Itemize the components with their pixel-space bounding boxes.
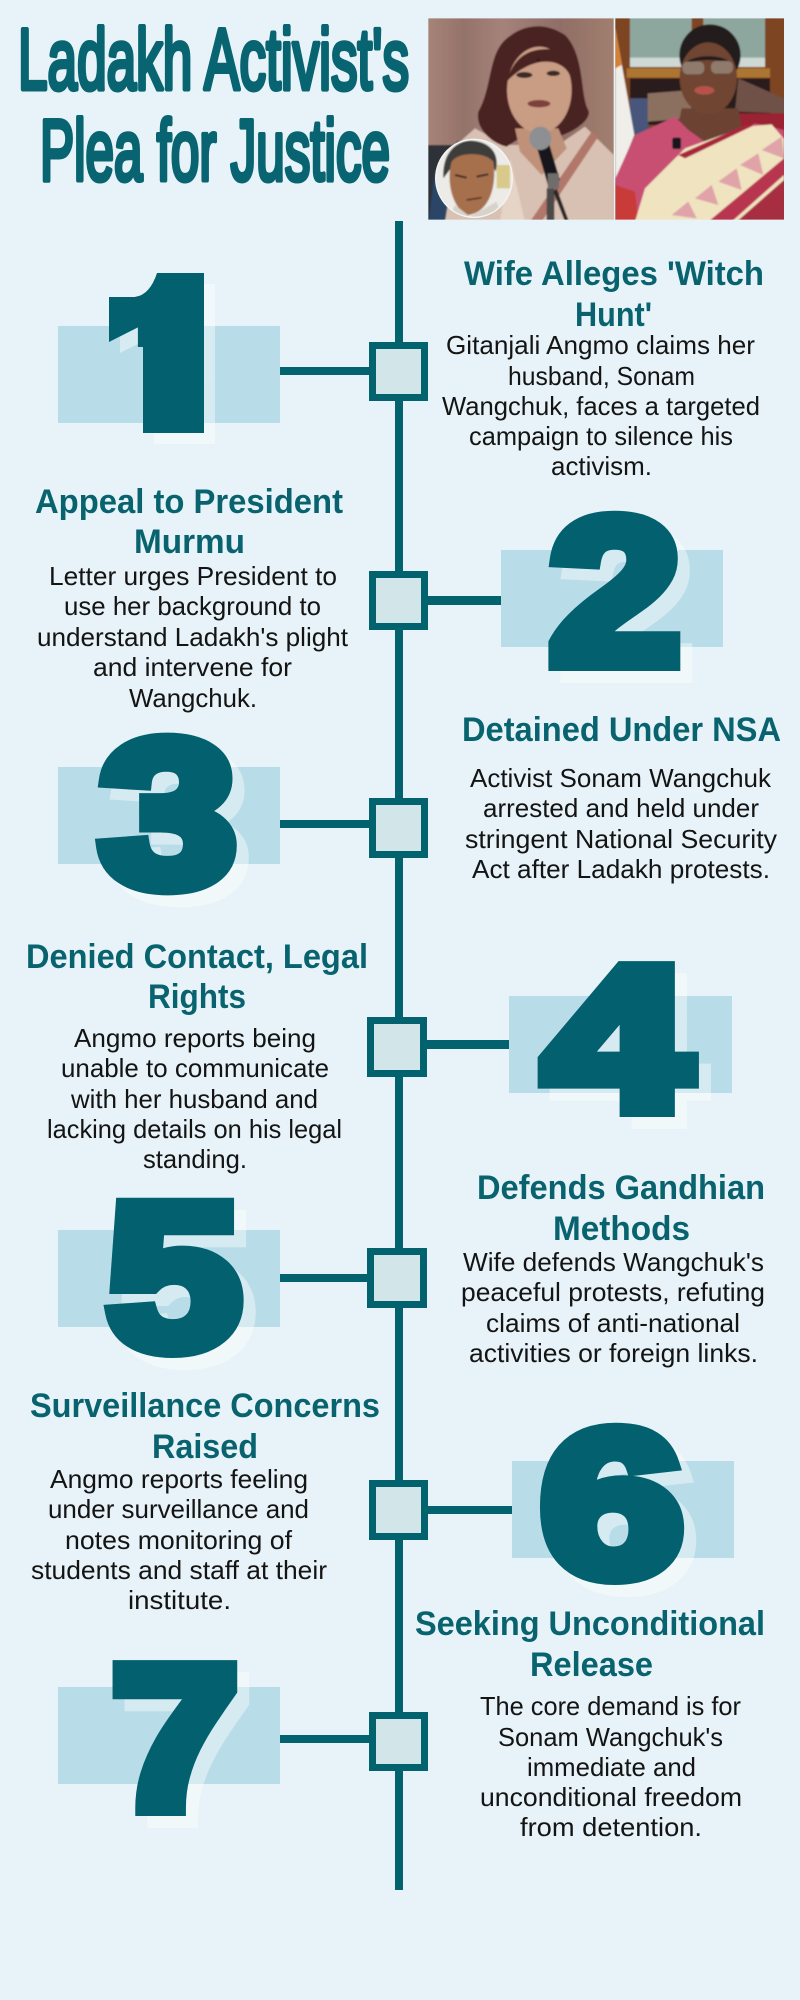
description: claims of anti-national bbox=[486, 1308, 740, 1338]
description: activism. bbox=[551, 451, 652, 481]
description: Sonam Wangchuk's bbox=[498, 1722, 723, 1752]
description bbox=[37, 561, 349, 713]
description: lacking details on his legal bbox=[47, 1114, 342, 1144]
number 6 block: 6 bbox=[553, 1401, 695, 1631]
step 3 bbox=[58, 699, 781, 941]
connector bbox=[280, 820, 370, 828]
node bbox=[370, 1020, 424, 1074]
description: The core demand is for bbox=[480, 1691, 741, 1721]
heading: Murmu bbox=[134, 523, 245, 561]
description: Wangchuk. bbox=[129, 683, 257, 713]
step 2 bbox=[35, 476, 723, 719]
title: Ladakh Activist's bbox=[18, 12, 409, 108]
description: unconditional freedom bbox=[480, 1782, 742, 1812]
number 1 block bbox=[58, 273, 280, 444]
heading: Release bbox=[530, 1646, 653, 1684]
connector bbox=[427, 1040, 509, 1049]
description: Wangchuk, faces a targeted bbox=[442, 391, 760, 421]
description: under surveillance and bbox=[48, 1494, 309, 1524]
number 4 block bbox=[509, 925, 732, 1164]
connector bbox=[280, 1735, 370, 1743]
connector bbox=[280, 1274, 368, 1282]
photo: President Droupadi Murmu bbox=[612, 15, 788, 225]
node bbox=[372, 574, 424, 626]
description: Wife defends Wangchuk's bbox=[463, 1247, 764, 1277]
description: Gitanjali Angmo claims her bbox=[446, 330, 755, 360]
number 3 block: 3 bbox=[112, 711, 248, 941]
description bbox=[465, 763, 777, 884]
number 2 block bbox=[501, 476, 723, 719]
description: and intervene for bbox=[93, 652, 292, 682]
number 2 block: 2 bbox=[562, 488, 692, 719]
description bbox=[47, 1023, 342, 1174]
timeline spine bbox=[395, 221, 403, 1890]
step 5 bbox=[58, 1163, 765, 1404]
connector bbox=[428, 1506, 512, 1514]
step 4 bbox=[26, 925, 732, 1174]
description: peaceful protests, refuting bbox=[461, 1277, 765, 1307]
description: arrested and held under bbox=[483, 793, 759, 823]
heading: Denied Contact, Legal bbox=[26, 938, 368, 976]
inset portrait: Sonam Wangchuk bbox=[435, 138, 515, 218]
description: unable to communicate bbox=[61, 1053, 329, 1083]
photo: Gitanjali Angmo at microphone bbox=[425, 15, 618, 225]
description bbox=[31, 1464, 327, 1615]
heading: Surveillance Concerns bbox=[30, 1387, 380, 1425]
connector bbox=[428, 596, 501, 605]
description: students and staff at their bbox=[31, 1555, 327, 1585]
description: standing. bbox=[143, 1144, 247, 1174]
connector bbox=[280, 367, 370, 375]
number 5 block: 5 bbox=[107, 1163, 241, 1392]
heading bbox=[30, 1387, 380, 1466]
heading: Wife Alleges 'Witch bbox=[464, 255, 764, 293]
number 6 block: 6 bbox=[541, 1389, 683, 1619]
description: from detention. bbox=[520, 1812, 702, 1842]
number 2 block: 2 bbox=[550, 476, 680, 707]
heading: Detained Under NSA bbox=[462, 711, 781, 749]
description: Angmo reports being bbox=[74, 1023, 316, 1053]
description bbox=[480, 1691, 742, 1842]
description: use her background to bbox=[64, 591, 321, 621]
heading: Defends Gandhian bbox=[477, 1169, 765, 1207]
heading: Seeking Unconditional bbox=[415, 1605, 765, 1643]
description: Letter urges President to bbox=[49, 561, 337, 591]
heading: Raised bbox=[152, 1428, 258, 1466]
heading: Methods bbox=[553, 1210, 690, 1248]
number 7 block: 7 bbox=[124, 1636, 250, 1863]
description bbox=[461, 1247, 765, 1368]
description: immediate and bbox=[527, 1752, 696, 1782]
heading bbox=[35, 483, 343, 561]
heading bbox=[415, 1605, 765, 1684]
step 6 bbox=[30, 1387, 734, 1631]
number 1 block: 1 bbox=[76, 224, 254, 511]
node bbox=[372, 802, 424, 854]
description: institute. bbox=[128, 1585, 231, 1615]
number 4 block: 4 bbox=[556, 937, 702, 1164]
description: understand Ladakh's plight bbox=[37, 622, 349, 652]
number 1 block: 1 bbox=[87, 235, 265, 522]
step 1 bbox=[58, 260, 762, 476]
number 3 block bbox=[58, 699, 280, 941]
heading: Hunt' bbox=[575, 296, 652, 334]
node bbox=[372, 1484, 424, 1536]
number 7 block: 7 bbox=[112, 1624, 238, 1851]
step 7 bbox=[58, 1605, 765, 1863]
heading bbox=[26, 938, 368, 1016]
title: Plea for Justice bbox=[40, 103, 390, 199]
node bbox=[370, 1252, 424, 1304]
description: husband, Sonam bbox=[508, 361, 695, 391]
node bbox=[372, 346, 424, 398]
description: stringent National Security bbox=[465, 824, 777, 854]
heading bbox=[464, 255, 764, 334]
description bbox=[442, 330, 760, 481]
title bbox=[18, 12, 409, 199]
heading: Appeal to President bbox=[35, 483, 343, 521]
heading bbox=[477, 1169, 765, 1248]
description: Activist Sonam Wangchuk bbox=[470, 763, 772, 793]
number 5 block: 5 bbox=[119, 1175, 253, 1404]
number 6 block bbox=[512, 1389, 734, 1631]
heading: Rights bbox=[148, 978, 246, 1016]
description: Angmo reports feeling bbox=[50, 1464, 308, 1494]
description: activities or foreign links. bbox=[469, 1338, 758, 1368]
number 5 block bbox=[58, 1163, 280, 1404]
number 7 block bbox=[58, 1624, 280, 1863]
description: Act after Ladakh protests. bbox=[472, 854, 770, 884]
number 3 block: 3 bbox=[100, 699, 236, 929]
photo collage: Gitanjali Angmo, Sonam Wangchuk inset, President Murmu bbox=[425, 15, 788, 225]
description: with her husband and bbox=[70, 1084, 318, 1114]
description: notes monitoring of bbox=[65, 1525, 293, 1555]
description: campaign to silence his bbox=[469, 421, 733, 451]
number 4 block: 4 bbox=[544, 925, 690, 1152]
node bbox=[372, 1716, 424, 1768]
